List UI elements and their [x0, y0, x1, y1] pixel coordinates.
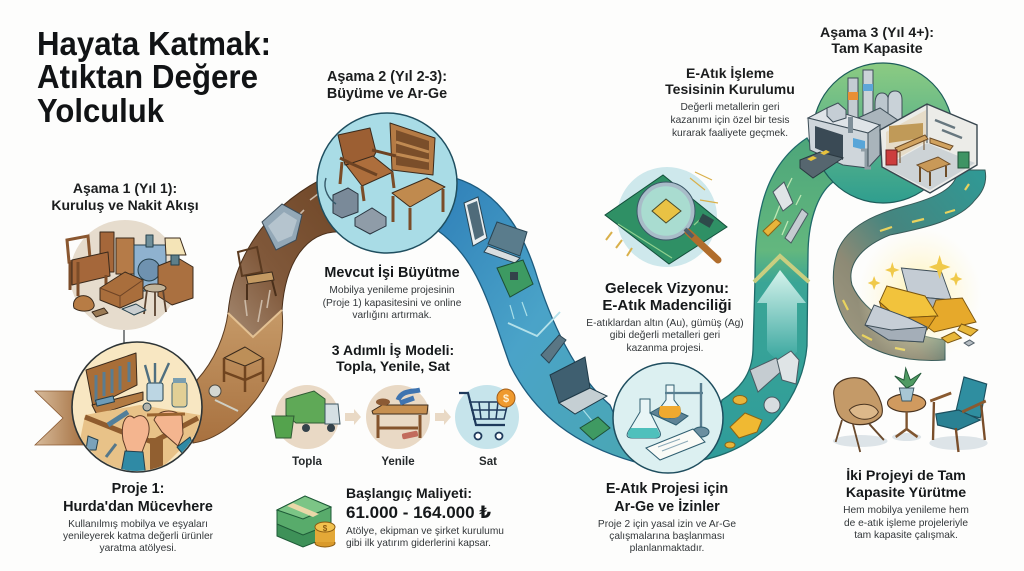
icons: scrap on brown ribbon	[209, 204, 302, 411]
heading: both projects: İki Projeyi de Tam	[846, 467, 966, 484]
panel: run both projects	[843, 467, 969, 541]
text: future vision: E-atıklardan altın (Au), gümüş (Ag)	[586, 318, 744, 329]
panel: stage 3	[800, 25, 977, 203]
text: facility: kazanımı için özel bir tesis	[671, 115, 789, 126]
project 1 text: yaratma atölyesi.	[99, 543, 177, 554]
heading: stage 3	[820, 25, 934, 57]
icon: workshop circle	[72, 342, 202, 478]
title: Yolculuk	[37, 92, 165, 129]
panel: stage 1	[51, 180, 214, 554]
project 1 text: yenileyerek katma değerli ürünler	[63, 531, 214, 542]
icon: money stack	[277, 496, 335, 547]
project 1 heading: Proje 1:	[112, 481, 164, 497]
heading: stage 2: Aşama 2 (Yıl 2-3):	[327, 69, 447, 85]
arrow	[345, 409, 361, 425]
text: e-waste R and D: Proje 2 için yasal izin ve Ar-Ge	[598, 519, 736, 530]
icon: circuit board and magnifier	[605, 167, 727, 267]
text: both projects: tam kapasite çalışmak.	[854, 530, 958, 541]
text: both projects	[843, 505, 969, 541]
heading: future vision	[602, 280, 732, 314]
heading: both projects	[846, 467, 966, 501]
heading: stage 3: Aşama 3 (Yıl 4+):	[820, 25, 934, 41]
heading: e-waste R and D	[606, 481, 728, 515]
ribbon path: blue e-waste section	[437, 178, 635, 462]
icons: electronics on blue ribbon	[464, 197, 610, 440]
icon: money stack: $	[323, 524, 328, 533]
icons: metals on green ribbon	[725, 182, 808, 448]
text: facility: kurarak faaliyete geçmek.	[672, 128, 788, 139]
section: grow current business: varlığını artırmak.	[352, 310, 432, 321]
title: Hayata Katmak:	[37, 25, 271, 62]
text: initial cost: 61.000 - 164.000 ₺	[346, 503, 491, 522]
heading: stage 2	[327, 69, 447, 102]
text: initial cost: Atölye, ekipman ve şirket kurulumu	[346, 526, 504, 537]
project 1 text: Kullanılmış mobilya ve eşyaları	[68, 519, 208, 530]
text: future vision: gibi değerli metalleri geri	[610, 330, 720, 341]
text: future vision	[586, 318, 744, 354]
icon: lab circle	[613, 363, 723, 473]
icon: collect	[272, 385, 340, 449]
text: initial cost	[346, 485, 504, 549]
heading: stage 3: Tam Kapasite	[831, 41, 923, 57]
panel: e-waste facility	[665, 65, 795, 139]
icon: renew	[366, 385, 430, 449]
arrow	[435, 409, 451, 425]
icon: sell	[455, 385, 519, 449]
heading: stage 1: Kuruluş ve Nakit Akışı	[51, 197, 199, 213]
heading: stage 1	[51, 180, 199, 213]
heading: facility	[665, 65, 795, 97]
heading: business model: Topla, Yenile, Sat	[336, 358, 450, 374]
ribbon path: green growth section	[703, 138, 833, 460]
section: grow current business	[323, 264, 462, 321]
project 1 heading	[63, 481, 213, 515]
text: e-waste R and D: çalışmalarına başlanması	[609, 531, 725, 542]
heading: business model	[332, 342, 454, 374]
arrow: upward growth	[757, 270, 806, 359]
section: grow current business: (Proje 1) kapasitesini ve online	[323, 298, 462, 309]
heading: stage 2: Büyüme ve Ar-Ge	[327, 86, 447, 102]
project 1 heading: Hurda'dan Mücevhere	[63, 499, 213, 515]
icon: factory circle	[800, 63, 977, 203]
panel: e-waste R and D	[598, 363, 736, 554]
title: Atıktan Değere	[37, 58, 258, 95]
text: initial cost: Başlangıç Maliyeti:	[346, 485, 472, 501]
step labels	[292, 456, 497, 468]
ribbon path: wood start tail	[35, 391, 85, 445]
icon: sell: $	[503, 393, 509, 405]
project 1 text	[63, 519, 214, 554]
panel: stage 2	[272, 69, 519, 549]
text: e-waste R and D: planlanmaktadır.	[630, 543, 704, 554]
text: facility: Değerli metallerin geri	[680, 102, 780, 113]
section: grow current business: Mevcut İşi Büyütme	[324, 264, 460, 281]
step labels: Sat	[479, 456, 497, 468]
heading: facility: E-Atık İşleme	[686, 65, 774, 81]
section: grow current business: Mobilya yenileme projesinin	[329, 285, 455, 296]
heading: future vision: E-Atık Madenciliği	[602, 297, 732, 314]
connector line	[123, 330, 125, 345]
heading: future vision: Gelecek Vizyonu:	[605, 280, 729, 297]
icon: used furniture circle	[67, 220, 193, 330]
icon: furniture set	[833, 368, 988, 452]
heading: both projects: Kapasite Yürütme	[846, 485, 966, 501]
title	[37, 25, 271, 129]
icon: gold and silver bars	[858, 228, 981, 364]
step labels: Topla	[292, 456, 323, 468]
panel: future vision	[586, 167, 744, 354]
heading: e-waste R and D: Ar-Ge ve İzinler	[614, 498, 720, 515]
text: both projects: de e-atık işleme projeleriyle	[844, 518, 968, 529]
heading: e-waste R and D: E-Atık Projesi için	[606, 481, 728, 497]
text: future vision: kazanma projesi.	[626, 343, 704, 354]
text: both projects: Hem mobilya yenileme hem	[843, 505, 969, 516]
icon: furniture and electronics circle	[317, 113, 457, 253]
text: e-waste R and D	[598, 519, 736, 554]
text: facility	[671, 102, 789, 139]
heading: stage 1: Aşama 1 (Yıl 1):	[73, 180, 177, 196]
step labels: Yenile	[381, 456, 415, 468]
ribbon path: wood and scrap section	[193, 180, 345, 443]
heading: facility: Tesisinin Kurulumu	[665, 81, 795, 97]
heading: business model: 3 Adımlı İş Modeli:	[332, 342, 454, 358]
ribbon path: teal to grey refined metals	[833, 170, 986, 360]
text: initial cost: gibi ilk yatırım giderlerini kapsar.	[346, 538, 491, 549]
